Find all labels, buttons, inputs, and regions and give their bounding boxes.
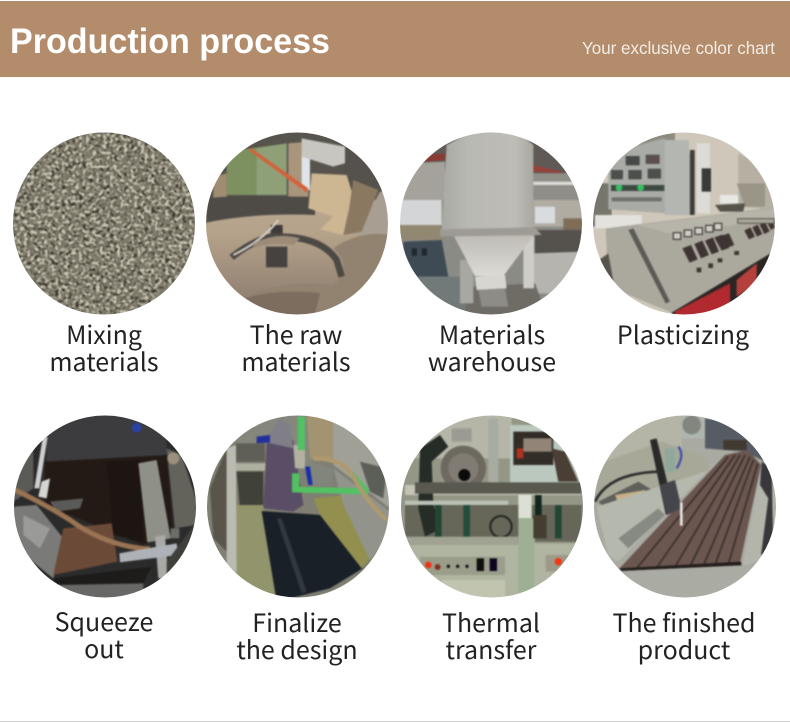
step 6: finalize the design <box>203 412 393 667</box>
step 2: the raw materials <box>206 132 388 372</box>
photo: finished boards <box>592 412 782 602</box>
step 1: mixing materials <box>13 132 195 379</box>
label: the design <box>236 631 358 667</box>
photo: raw material mixer <box>206 132 388 314</box>
title: Production process <box>10 22 330 61</box>
photo: control panels <box>592 127 778 320</box>
subtitle: Your exclusive color chart <box>582 38 775 58</box>
label: product <box>638 631 731 667</box>
photo: cooling tank <box>203 412 393 602</box>
label: Finalize <box>252 604 342 640</box>
label: materials <box>49 343 159 379</box>
label: Squeeze <box>55 603 153 639</box>
step 3: materials warehouse <box>400 132 582 372</box>
label: Thermal <box>442 604 540 640</box>
label: Materials <box>439 316 545 352</box>
label: materials <box>241 343 351 379</box>
label: The raw <box>250 316 342 352</box>
label: Plasticizing <box>617 316 749 352</box>
step 5: squeeze out <box>10 412 200 666</box>
label: Mixing <box>66 316 142 352</box>
step 7: thermal transfer <box>398 412 588 667</box>
photo: transfer machine <box>398 412 588 603</box>
label: out <box>84 630 124 666</box>
label: The finished <box>613 604 755 640</box>
step 8: the finished product <box>592 412 782 667</box>
label: transfer <box>446 631 537 667</box>
step 4: plasticizing <box>592 127 778 352</box>
photo: hopper silo <box>400 132 582 314</box>
photo: grey pellets <box>13 132 195 315</box>
photo: roller and hose <box>10 412 200 602</box>
label: warehouse <box>428 343 556 379</box>
header banner <box>0 1 790 77</box>
